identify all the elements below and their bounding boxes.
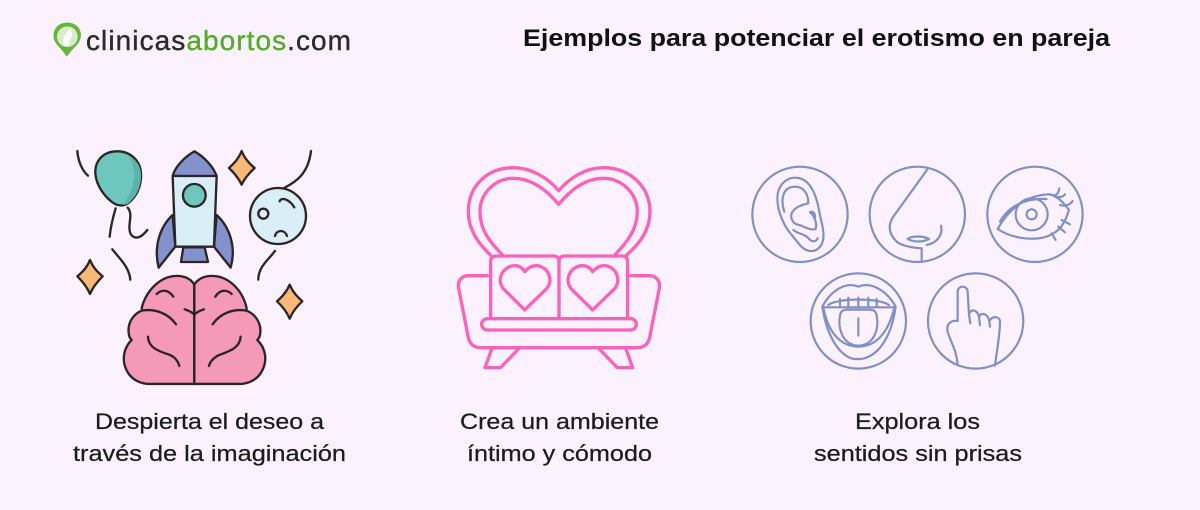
- icon: eye: [987, 167, 1083, 262]
- logo wordmark: clinicasabortos.com: [86, 25, 351, 56]
- caption: Explora los: [855, 409, 980, 434]
- caption line 2: sentidos sin prisas: [814, 441, 1022, 466]
- caption: Crea un ambiente: [460, 409, 659, 434]
- caption line 2: íntimo y cómodo: [467, 441, 652, 466]
- illustration: balloon, rocket, moon and brain: [77, 151, 311, 384]
- icon: location pin with leaf: [53, 23, 81, 57]
- caption: Despierta el deseo a: [95, 409, 325, 434]
- icon: sparkles: [77, 151, 302, 319]
- cushions: [491, 256, 628, 318]
- icons: five senses: [752, 167, 1083, 369]
- icon: moon: [250, 151, 311, 244]
- title: Ejemplos para potenciar el erotismo en pareja: [523, 25, 1111, 52]
- icon: heart-shaped sofa: [458, 168, 660, 368]
- panel: ambience: [458, 168, 660, 466]
- icon: finger: [928, 273, 1023, 369]
- heart backrest: [468, 168, 650, 256]
- panel: imagination: [73, 151, 346, 466]
- logo: clinicasabortos.com: [53, 23, 351, 57]
- icon: ear: [752, 167, 848, 262]
- sofa base: [458, 276, 660, 368]
- caption line 2: través de la imaginación: [73, 441, 346, 466]
- icon: nose: [870, 167, 965, 262]
- panel: senses: [752, 167, 1083, 466]
- icon: mouth: [811, 273, 906, 369]
- icon: rocket: [157, 151, 233, 268]
- decorative motion lines: [112, 249, 275, 280]
- icon: balloon: [77, 151, 147, 238]
- icon: brain: [124, 276, 265, 384]
